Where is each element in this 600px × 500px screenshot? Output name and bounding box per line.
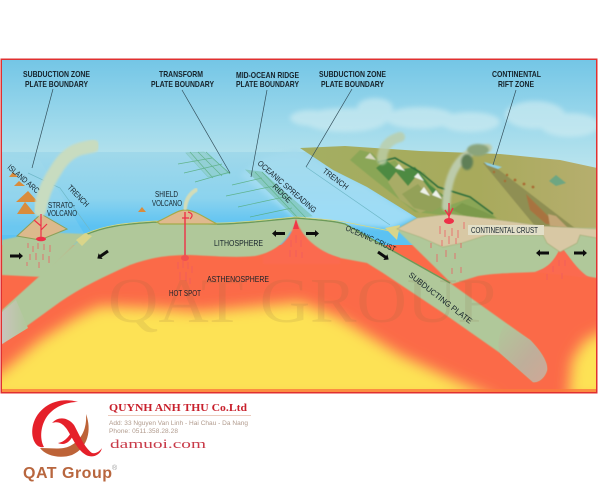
volcanic plume: shield [185, 190, 196, 208]
heading labels: TRANSFORM [159, 69, 203, 79]
clouds [290, 98, 600, 137]
asthenosphere [2, 245, 596, 392]
feature labels: ISLAND ARC [6, 163, 41, 195]
volcano cone: shield [157, 210, 217, 224]
ocean shading [2, 206, 84, 235]
volcanic plume: strato [40, 146, 93, 210]
feature labels: VOLCANO [152, 199, 182, 208]
watermark: QAT GROUP [108, 265, 496, 336]
bottom orange edge [2, 389, 596, 392]
plate: left overriding [2, 232, 85, 277]
slab fade right [499, 330, 547, 382]
heading labels: MID-OCEAN RIDGE [236, 70, 299, 80]
logo mark [32, 400, 102, 457]
heading labels: PLATE BOUNDARY [236, 79, 299, 89]
magma droplets [27, 222, 565, 284]
sea lines [28, 167, 390, 230]
yellow mantle [0, 302, 600, 400]
heading labels: PLATE BOUNDARY [151, 79, 214, 89]
feature labels: ASTHENOSPHERE [207, 275, 269, 284]
heading labels: PLATE BOUNDARY [25, 79, 88, 89]
trench infill left [76, 233, 92, 246]
sea [2, 152, 422, 245]
panel: tectonic cross-section illustration [0, 58, 600, 400]
logo: brown crescent [40, 414, 89, 457]
feature labels: VOLCANO [47, 209, 77, 218]
slab fade left [2, 300, 28, 344]
feature labels: OCEANIC CRUST [344, 224, 397, 254]
land [300, 146, 597, 232]
logo: red ribbon [52, 418, 102, 456]
volcano cone: stratovolcano [17, 214, 67, 240]
address: Add: 33 Nguyen Van Linh - Hai Chau - Da Nang [109, 420, 248, 427]
logo wordmark: ® [112, 464, 118, 472]
plate: right overriding [395, 228, 597, 284]
heading labels [23, 69, 541, 89]
feature labels: LITHOSPHERE [214, 239, 263, 248]
scene contents [0, 60, 600, 400]
lithosphere [2, 218, 597, 382]
heading labels: PLATE BOUNDARY [321, 79, 384, 89]
logo: red arc [32, 400, 78, 447]
company name: QUYNH ANH THU Co.Ltd [109, 403, 248, 414]
right ocean water [244, 163, 416, 230]
mountains [350, 150, 497, 218]
feature labels [6, 159, 538, 326]
feature labels: TRENCH [321, 166, 350, 192]
phone: Phone: 0511.358.28.28 [109, 428, 178, 435]
feature labels: STRATO- [48, 201, 75, 210]
rift magma [536, 250, 589, 277]
rift valley [484, 162, 574, 228]
divider line [108, 415, 251, 416]
arrows [10, 230, 587, 262]
ridge magma [280, 220, 340, 258]
continental crust label box [468, 225, 544, 235]
sea floor highlight [85, 217, 395, 234]
feature labels: RIDGE [271, 182, 293, 205]
feature labels: HOT SPOT [169, 289, 201, 298]
continental crust [397, 214, 597, 252]
frame border [0, 58, 598, 394]
website: damuoi.com [110, 436, 206, 451]
heading labels: SUBDUCTION ZONE [319, 69, 386, 79]
ridge magma tip [293, 219, 299, 229]
feature labels: CONTINENTAL CRUST [471, 226, 538, 235]
plate: central oceanic [2, 218, 547, 382]
volcanic arc islands [9, 172, 146, 214]
transform boundary grid lines [178, 152, 312, 218]
magma conduits [34, 203, 454, 261]
rift smoke and mountain smoke [382, 137, 489, 207]
oceanic crust edge [85, 218, 450, 283]
heading labels: RIFT ZONE [498, 79, 534, 89]
trench infill right [385, 225, 400, 240]
feature labels: SHIELD [155, 190, 178, 199]
leader lines [32, 89, 516, 177]
heading labels: CONTINENTAL [492, 69, 541, 79]
feature labels: SUBDUCTING PLATE [407, 270, 474, 326]
feature labels: OCEANIC SPREADING [256, 159, 318, 215]
feature labels: TRENCH [66, 183, 91, 209]
logo wordmark: QAT Group [23, 465, 112, 482]
sky [2, 60, 596, 168]
heading labels: SUBDUCTION ZONE [23, 69, 90, 79]
